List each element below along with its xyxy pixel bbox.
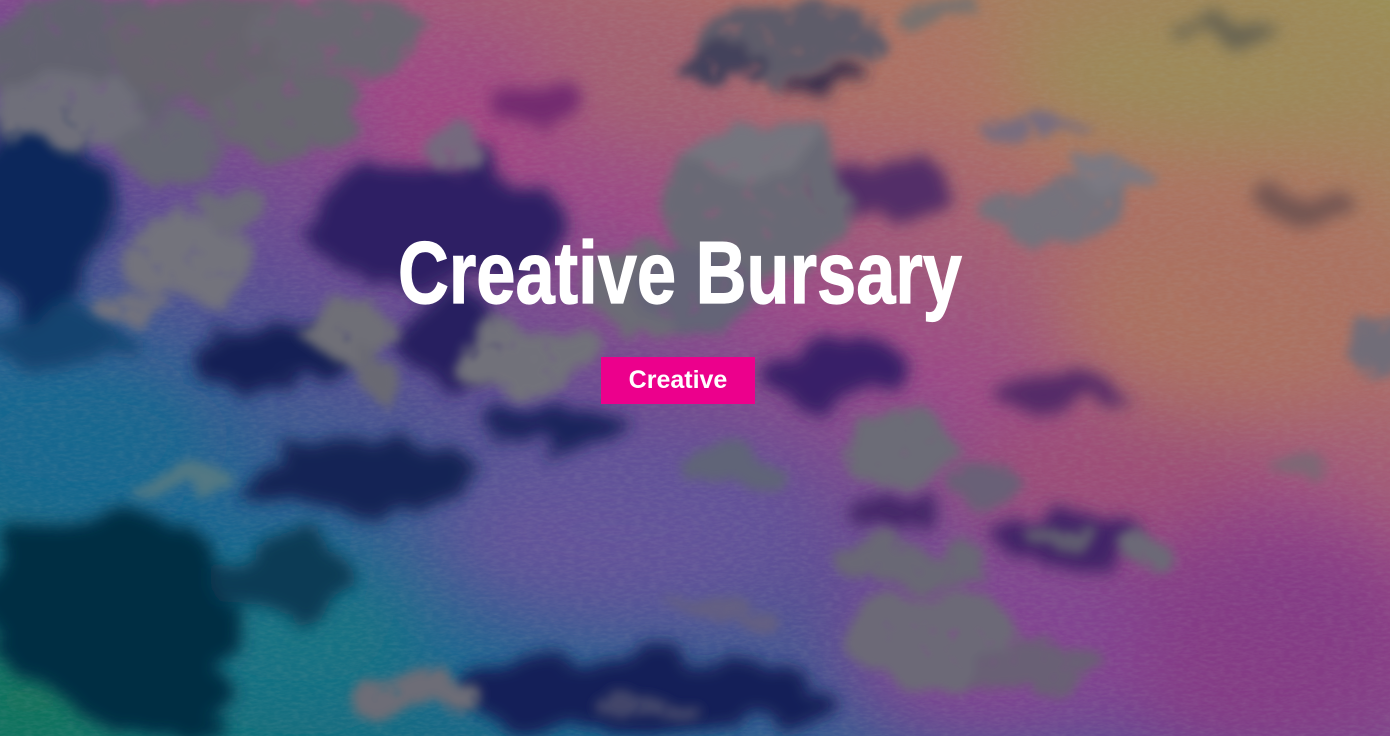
tag button: Creative bbox=[601, 357, 755, 404]
title: Creative Bursary bbox=[398, 223, 962, 322]
tag button: Creative: Creative bbox=[629, 366, 727, 394]
